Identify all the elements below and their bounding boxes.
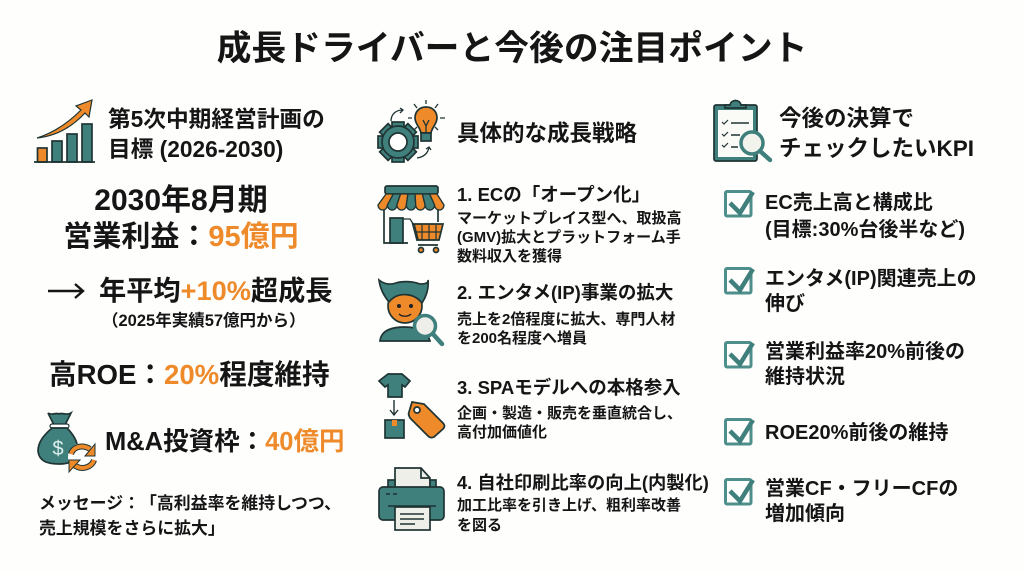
icon: printer — [378, 467, 445, 531]
strategy 4 title: 4. 自社印刷比率の向上(内製化) — [457, 472, 709, 493]
strategy 1 body — [457, 210, 682, 265]
strategy 4 body: 加工比率を引き上げ、粗利率改善 — [457, 497, 681, 514]
operating profit target: 2030年8月期 — [94, 184, 268, 217]
strategy 3 title: 3. SPAモデルへの本格参入 — [457, 377, 681, 398]
strategy 1 — [457, 184, 682, 265]
icon: checkbox — [724, 341, 755, 368]
KPI item 3 — [724, 340, 965, 388]
icon: shirt, box and price tag — [378, 373, 446, 439]
KPI item 5 — [724, 478, 958, 525]
strategy 4 — [457, 472, 709, 534]
strategy 2 title: 2. エンタメ(IP)事業の拡大 — [457, 282, 673, 303]
ROE target: 高ROE：20%程度維持 — [49, 359, 330, 390]
strategy 3 body: 高付加価値化 — [457, 424, 547, 441]
heading: strategies: 具体的な成長戦略 — [457, 121, 637, 146]
icon: checkbox — [724, 190, 755, 218]
strategy 4 body: を図る — [457, 517, 502, 534]
KPI text: 増加傾向 — [765, 503, 845, 525]
message: 売上規模をさらに拡大」 — [39, 519, 225, 538]
message: メッセージ：「高利益率を維持しつつ、 — [39, 494, 341, 513]
icon: person with magnifier — [378, 278, 444, 346]
strategy 3 — [457, 377, 682, 441]
strategy 2 body: 売上を2倍程度に拡大、専門人材 — [457, 311, 675, 328]
strategy 4 body — [457, 497, 681, 534]
heading: KPIs: チェックしたいKPI — [779, 136, 974, 161]
heading: KPIs — [779, 106, 974, 161]
KPI text: (目標:30%台後半など) — [765, 219, 965, 241]
KPI text: 伸び — [765, 293, 805, 315]
KPI item 2 — [724, 267, 977, 315]
strategy 1 body: マーケットプレイス型へ、取扱高 — [457, 210, 682, 227]
KPI text: EC売上高と構成比 — [765, 192, 933, 214]
operating profit target — [63, 184, 299, 253]
KPI text: 営業CF・フリーCFの — [765, 478, 958, 500]
strategy 1 body: (GMV)拡大とプラットフォーム手 — [457, 229, 681, 246]
KPI text: 営業利益率20%前後の — [765, 341, 965, 363]
KPI text: 維持状況 — [765, 366, 845, 388]
strategy 2 body: を200名程度へ増員 — [457, 330, 587, 347]
KPI text: ROE20%前後の維持 — [765, 422, 948, 444]
M&A budget: M&A投資枠：40億円 — [105, 428, 344, 456]
strategy 3 body: 企画・製造・販売を垂直統合し、 — [457, 405, 682, 422]
icon: checkbox — [724, 267, 755, 294]
panel: KPIs to check — [713, 100, 977, 525]
icon: checkbox — [724, 478, 755, 506]
KPI text — [765, 478, 958, 525]
annual growth: 年平均+10%超成長 — [99, 275, 332, 306]
heading: KPIs: 今後の決算で — [779, 106, 914, 131]
icon: checkbox — [724, 418, 755, 446]
icon: rising bar chart with arrow — [34, 99, 95, 163]
strategy 1 body: 数料収入を獲得 — [457, 248, 562, 265]
strategy 2 — [457, 282, 675, 347]
heading: mid-term plan — [108, 106, 325, 162]
icon: clipboard with magnifier — [713, 100, 772, 162]
strategy 1 title: 1. ECの「オープン化」 — [457, 184, 650, 205]
heading: mid-term plan: 第5次中期経営計画の — [108, 106, 325, 132]
strategy 2 body — [457, 311, 675, 347]
KPI text — [765, 192, 965, 241]
operating profit target: 営業利益：95億円 — [63, 221, 299, 253]
KPI text: エンタメ(IP)関連売上の — [765, 268, 977, 290]
icon: money bag with refresh arrows: $ — [52, 438, 64, 460]
message — [39, 494, 341, 538]
icon: money bag with refresh arrows — [37, 410, 97, 474]
heading: mid-term plan: 目標 (2026-2030) — [108, 136, 283, 162]
panel: growth strategies — [377, 100, 709, 534]
growth baseline note: （2025年実績57億円から） — [102, 312, 306, 330]
KPI item 4 — [724, 418, 948, 446]
strategy 3 body — [457, 405, 682, 441]
KPI text — [765, 268, 977, 315]
icon: gear and lightbulb — [377, 100, 445, 163]
KPI item 1 — [724, 190, 965, 241]
title: 成長ドライバーと今後の注目ポイント — [217, 29, 807, 68]
KPI text — [765, 340, 965, 388]
panel: mid-term plan targets — [34, 99, 344, 538]
icon: storefront with cart — [377, 185, 445, 254]
